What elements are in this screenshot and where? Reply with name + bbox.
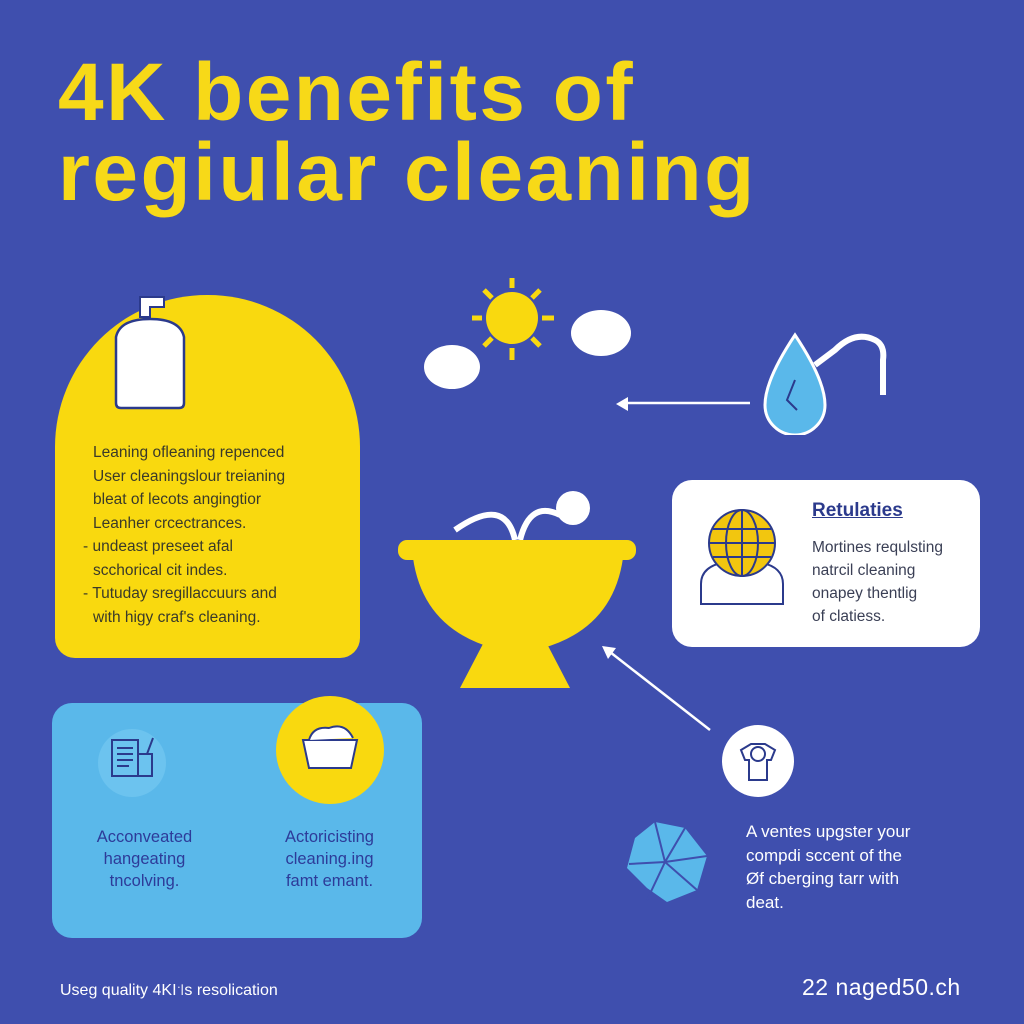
icon: sun with bubbles [424,278,631,389]
icon: laundry circle [276,696,384,804]
text block: User cleaningslour treianing [93,468,285,484]
title: regiular cleaning [58,127,757,218]
text block: onapey thentlig [812,585,917,602]
text block [812,539,943,625]
text: left: Acconveated [97,828,192,846]
panel: Retulaties card [672,480,980,647]
icon: globe person [700,509,784,605]
title: 4K benefits of [58,47,635,138]
title [58,47,757,218]
icon: document [98,729,166,797]
text block: scchorical cit indes. [93,562,227,578]
text block: bottom right: compdi sccent of the [746,846,902,864]
text block: - Tutuday sregillaccuurs and [83,585,277,602]
text block [83,444,285,626]
text block: bleat of lecots angingtior [93,491,261,508]
heading: Retulaties [812,500,903,521]
text block: natrcil cleaning [812,562,915,579]
panel: yellow info [55,295,360,658]
text block: bottom right: A ventes upgster your [746,822,910,841]
text: right [285,828,374,890]
panel: blue benefits [52,703,422,938]
text: right: cleaning.ing [285,850,374,868]
text block: of clatiess. [812,608,885,625]
footer left: Useg quality 4KI꜉s resolication [60,982,278,999]
text: left [96,828,192,890]
text: right: Actoricisting [285,828,374,846]
text block: bottom right: Øf cberging tarr with [746,869,899,888]
text block: bottom right [746,822,910,912]
text block: - undeast preseet afal [83,538,233,555]
text: left: hangeating [104,850,185,868]
icon: soap bottle [114,296,186,410]
text block: bottom right: deat. [746,892,784,912]
text block: Leaning ofleaning repenced [93,444,284,461]
footer right: 22 naged50.ch [802,974,961,1000]
text: right: famt emant. [286,872,373,890]
text block: Mortines requlsting [812,539,943,556]
arrow: to bowl [602,646,711,731]
text block: Leanher crcectrances. [93,514,246,532]
icon: blue crystal [627,822,707,902]
arrow: drop to sun [616,397,750,411]
icon: shirt circle [722,725,794,797]
icon: water drop with tap [764,332,886,435]
icon: bowl with fountain [398,491,636,688]
text block: with higy craf's cleaning. [93,608,261,626]
text: left: tncolving. [110,872,179,890]
